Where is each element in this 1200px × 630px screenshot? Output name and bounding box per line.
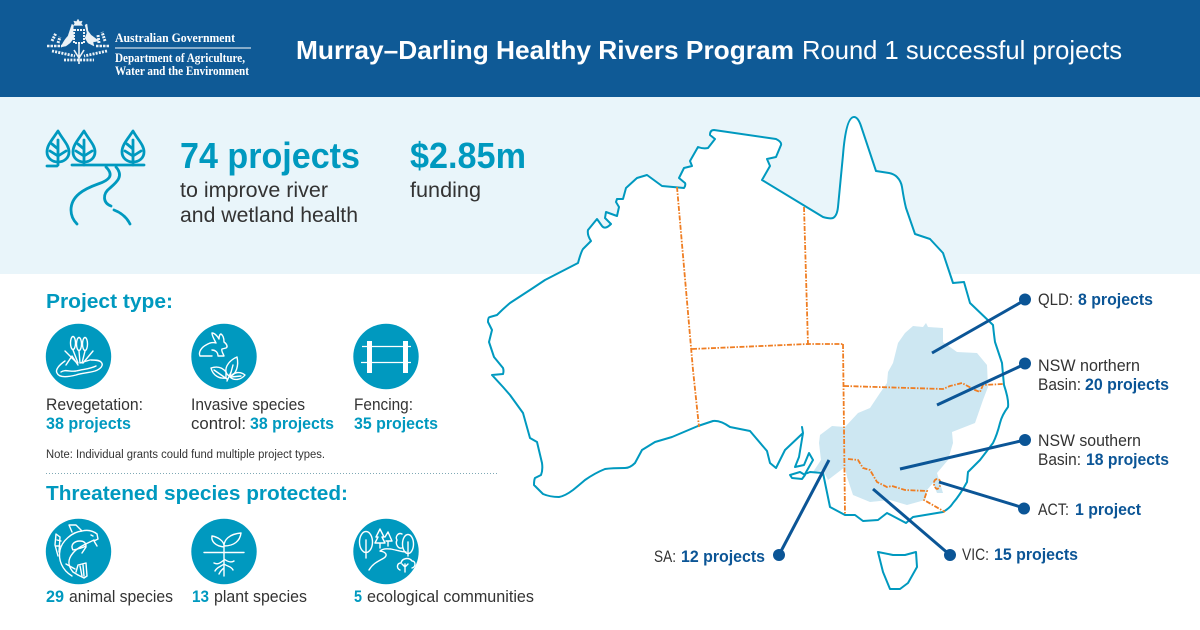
callout: NSW southern Basin — [900, 432, 1169, 469]
title: Round 1 successful projects — [802, 35, 1122, 65]
callout: QLD: 8 projects — [1078, 291, 1153, 309]
callout: ACT: ACT: — [1038, 501, 1069, 519]
callout: NSW southern Basin: 18 projects — [1086, 451, 1169, 469]
project type: fencing — [353, 324, 438, 433]
department name: Australian Government — [115, 30, 236, 45]
department name: Department of Agriculture, — [115, 51, 245, 65]
title — [296, 35, 1122, 65]
header banner — [0, 0, 1200, 97]
callout: QLD: QLD: — [1038, 291, 1073, 309]
callout: SA — [654, 460, 829, 566]
department name — [115, 30, 251, 78]
stat: funding — [410, 135, 526, 202]
icon: trees and river — [47, 131, 144, 224]
project type: invasive species control: 38 projects — [250, 415, 334, 433]
project type: revegetation — [46, 324, 143, 433]
stat: funding: funding — [410, 179, 481, 202]
threatened: ecological communities: ecological communities — [367, 588, 534, 606]
callout: NSW northern Basin — [937, 357, 1169, 405]
callout: NSW southern Basin: Basin: — [1038, 451, 1081, 469]
threatened: animal species — [46, 519, 173, 606]
heading: project type: Project type: — [46, 291, 173, 313]
map of Australia — [488, 117, 1008, 589]
callout: ACT — [939, 482, 1141, 519]
light blue summary band — [0, 97, 1200, 274]
map: state borders — [677, 187, 1003, 515]
threatened: ecological communities: 5 — [354, 588, 362, 606]
callout: VIC: 15 projects — [994, 546, 1078, 564]
project type: invasive species control: Invasive species — [191, 396, 305, 414]
map: Tasmania — [878, 552, 917, 589]
callout: SA: SA: — [654, 548, 676, 566]
callout: NSW northern Basin: Basin: — [1038, 376, 1081, 394]
department name: Water and the Environment — [115, 64, 250, 78]
callout: ACT: 1 project — [1075, 501, 1141, 519]
map: Murray-Darling Basin — [813, 323, 988, 505]
note: Note: Individual grants could fund multiple project types. — [46, 449, 325, 461]
callout: NSW northern Basin: NSW northern — [1038, 357, 1140, 375]
threatened: plant species — [191, 519, 307, 606]
callout: NSW northern Basin: 20 projects — [1085, 376, 1169, 394]
icon: coat of arms — [47, 19, 110, 64]
map: coastline — [488, 117, 1008, 523]
threatened: plant species: plant species — [214, 588, 307, 606]
callout: VIC — [873, 489, 1078, 564]
stat: funding: $2.85m — [410, 135, 526, 176]
project type: revegetation: 38 projects — [46, 415, 131, 433]
stat: 74 projects: and wetland health — [180, 204, 358, 227]
map: Kangaroo Island — [790, 472, 805, 479]
threatened: plant species: 13 — [192, 588, 209, 606]
stat: 74 projects — [180, 135, 360, 227]
project type: invasive species control — [191, 324, 334, 433]
threatened: ecological communities — [353, 519, 534, 606]
map: mainland fill — [488, 117, 1008, 523]
project type: fencing: Fencing: — [354, 396, 413, 414]
callout: QLD — [932, 291, 1153, 353]
callout: NSW southern Basin: NSW southern — [1038, 432, 1141, 450]
stat: 74 projects: to improve river — [180, 179, 328, 202]
callout: VIC: VIC: — [962, 546, 989, 564]
stat: 74 projects: 74 projects — [180, 135, 360, 176]
threatened: animal species: 29 — [46, 588, 64, 606]
threatened: animal species: animal species — [69, 588, 173, 606]
project type: invasive species control: control: — [191, 415, 246, 433]
project type: revegetation: Revegetation: — [46, 396, 143, 414]
heading: threatened species: Threatened species protected: — [46, 483, 348, 505]
callout: SA: 12 projects — [681, 548, 765, 566]
title: Murray–Darling Healthy Rivers Program — [296, 35, 794, 65]
project type: fencing: 35 projects — [354, 415, 438, 433]
